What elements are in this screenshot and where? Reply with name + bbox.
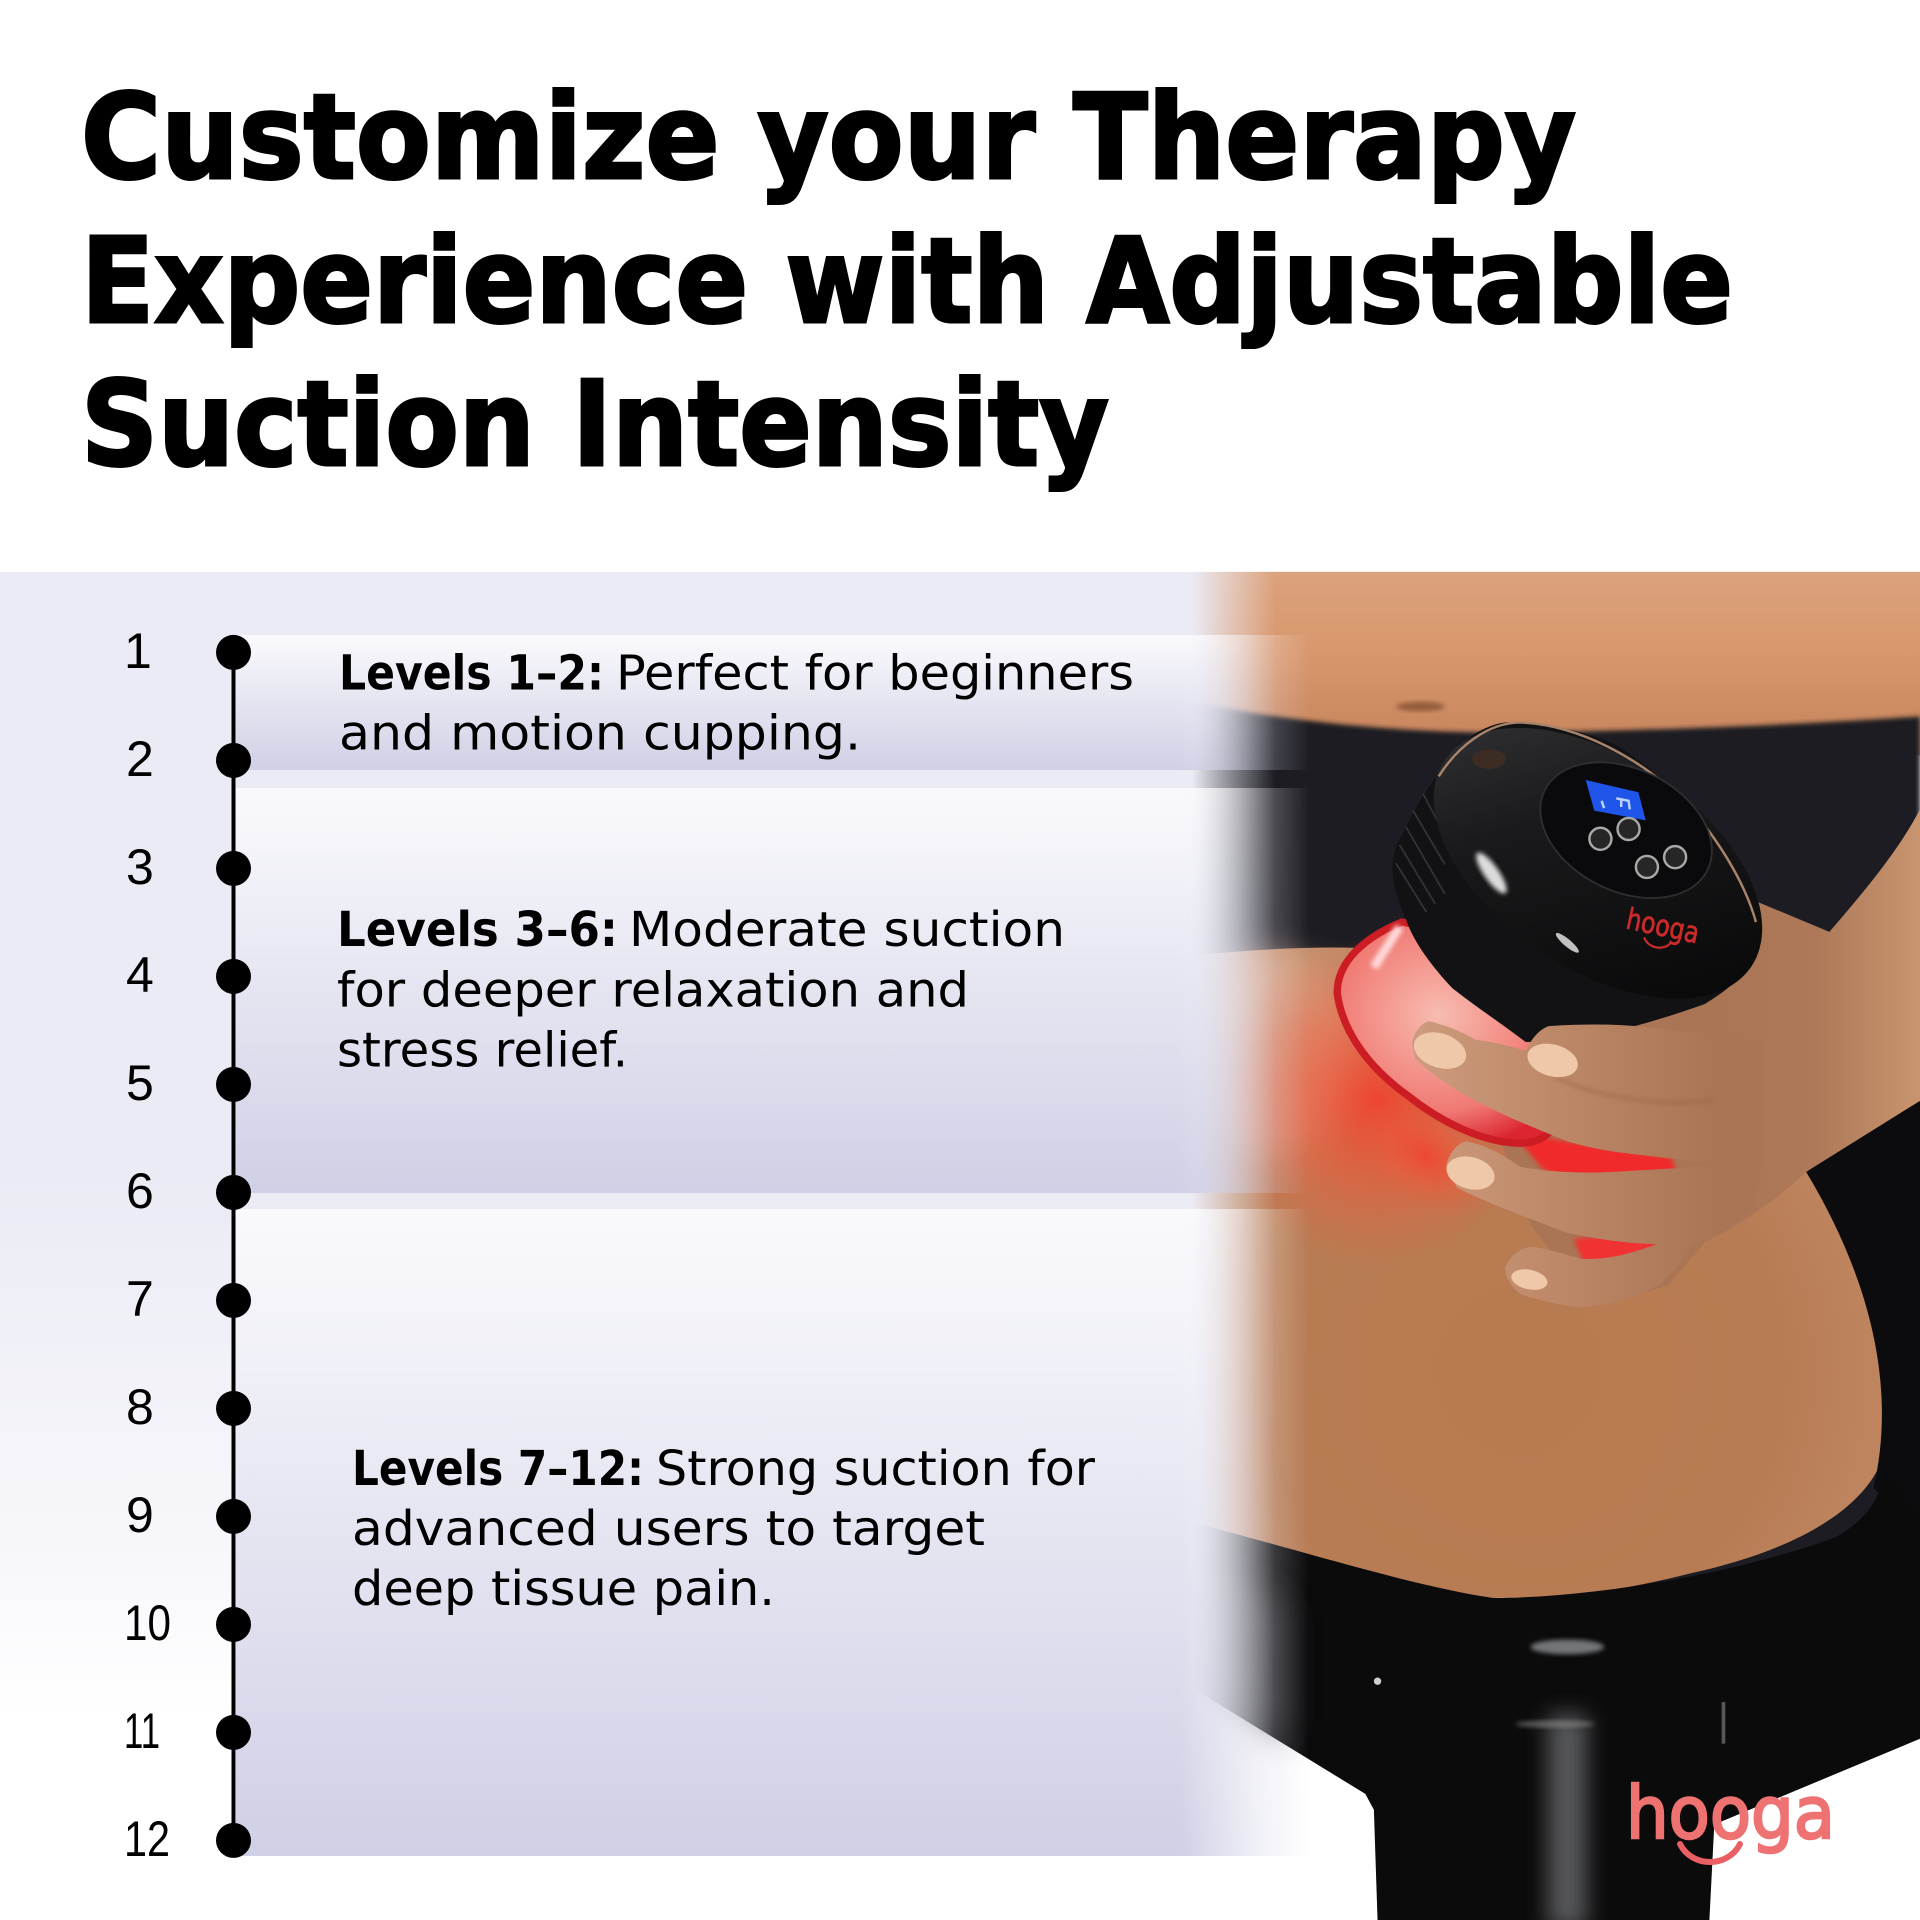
band: levels 3 to 6 bbox=[236, 788, 1310, 1193]
cup glare bbox=[1374, 927, 1400, 967]
text: levels 7-12: Levels 7–12: bbox=[352, 1441, 644, 1497]
panel: level background bbox=[0, 572, 1300, 1920]
title: Suction Intensity bbox=[81, 355, 1109, 493]
control panel bbox=[1518, 735, 1734, 925]
chair seam bbox=[1722, 1702, 1725, 1744]
device ribs bbox=[1396, 793, 1445, 912]
text: levels 7-12: advanced users to target bbox=[352, 1501, 985, 1557]
text: levels 1-2: Levels 1–2: bbox=[339, 646, 604, 702]
text: levels 7-12 bbox=[352, 1441, 1095, 1617]
chair leg highlight bbox=[1548, 1714, 1587, 1920]
level numbers: 4 bbox=[126, 947, 154, 1003]
text: levels 1-2: and motion cupping. bbox=[339, 706, 861, 762]
logo: hooga: hooga bbox=[1626, 1771, 1835, 1855]
timeline bbox=[216, 635, 251, 1858]
black shorts bbox=[1176, 698, 1920, 1592]
glass cup bbox=[1337, 922, 1580, 1143]
text: levels 1-2 bbox=[339, 646, 1134, 762]
level numbers: 7 bbox=[126, 1271, 154, 1327]
photo: device applied to thigh bbox=[1176, 572, 1920, 1920]
device reflection bbox=[1472, 749, 1506, 769]
level numbers: 5 bbox=[126, 1055, 154, 1111]
text: levels 7-12: Strong suction for bbox=[656, 1441, 1095, 1497]
level numbers: 10 bbox=[124, 1595, 171, 1651]
finger three bbox=[1446, 1141, 1763, 1244]
level numbers: 12 bbox=[124, 1811, 170, 1867]
device logo: hooga bbox=[1623, 902, 1702, 950]
finger four bbox=[1505, 1231, 1691, 1308]
device rim bbox=[1439, 722, 1756, 922]
finger one bbox=[1412, 1021, 1763, 1169]
red glow on skin bbox=[1252, 944, 1505, 1240]
finger crease bbox=[1555, 1078, 1714, 1102]
text: levels 3-6: stress relief. bbox=[337, 1022, 628, 1078]
level numbers: 3 bbox=[126, 839, 154, 895]
red light under fingers bbox=[1520, 1136, 1678, 1172]
right shorts shadow bbox=[1806, 1101, 1920, 1543]
screen digits bbox=[1602, 798, 1630, 809]
level numbers bbox=[124, 623, 171, 1867]
forearm and palm bbox=[1502, 810, 1920, 1291]
finger two bbox=[1524, 1025, 1763, 1103]
level numbers: 9 bbox=[126, 1487, 154, 1543]
text: levels 3-6: Levels 3–6: bbox=[337, 902, 618, 958]
buttons bbox=[1589, 818, 1686, 878]
device glare lower bbox=[1554, 931, 1581, 955]
text: levels 1-2: Perfect for beginners bbox=[616, 646, 1134, 702]
text: levels 3-6: Moderate suction bbox=[629, 902, 1065, 958]
cup red light lower bbox=[1572, 1236, 1657, 1259]
chair seat and frame bbox=[1176, 1469, 1920, 1920]
title bbox=[81, 68, 1733, 493]
screen bbox=[1586, 780, 1646, 820]
text: levels 7-12: deep tissue pain. bbox=[352, 1561, 775, 1617]
chair edge glint bbox=[1516, 1720, 1594, 1728]
red glow along rim bbox=[1396, 1131, 1472, 1202]
text: levels 3-6: for deeper relaxation and bbox=[337, 962, 969, 1018]
thigh highlight bbox=[1234, 933, 1350, 1152]
level numbers: 2 bbox=[126, 731, 154, 787]
device glare bbox=[1471, 849, 1511, 897]
thigh bbox=[1176, 948, 1887, 1598]
chair screw bbox=[1374, 1678, 1381, 1685]
level numbers: 11 bbox=[124, 1703, 160, 1759]
chair corner glint bbox=[1531, 1640, 1604, 1654]
level numbers: 6 bbox=[126, 1163, 154, 1219]
band: levels 1 to 2 bbox=[236, 635, 1310, 770]
level numbers: 1 bbox=[124, 623, 152, 679]
device top face bbox=[1386, 673, 1810, 1054]
fingernails bbox=[1409, 1026, 1582, 1293]
level numbers: 8 bbox=[126, 1379, 154, 1435]
title: Customize your Therapy bbox=[81, 68, 1576, 206]
device body bbox=[1392, 722, 1757, 1042]
torso skin bbox=[1176, 572, 1920, 756]
navel shadow bbox=[1396, 702, 1445, 711]
text: levels 3-6 bbox=[337, 902, 1065, 1078]
title: Experience with Adjustable bbox=[81, 212, 1733, 350]
chair frame sheen bbox=[1223, 1588, 1296, 1751]
band: levels 7 to 12 bbox=[236, 1209, 1310, 1856]
